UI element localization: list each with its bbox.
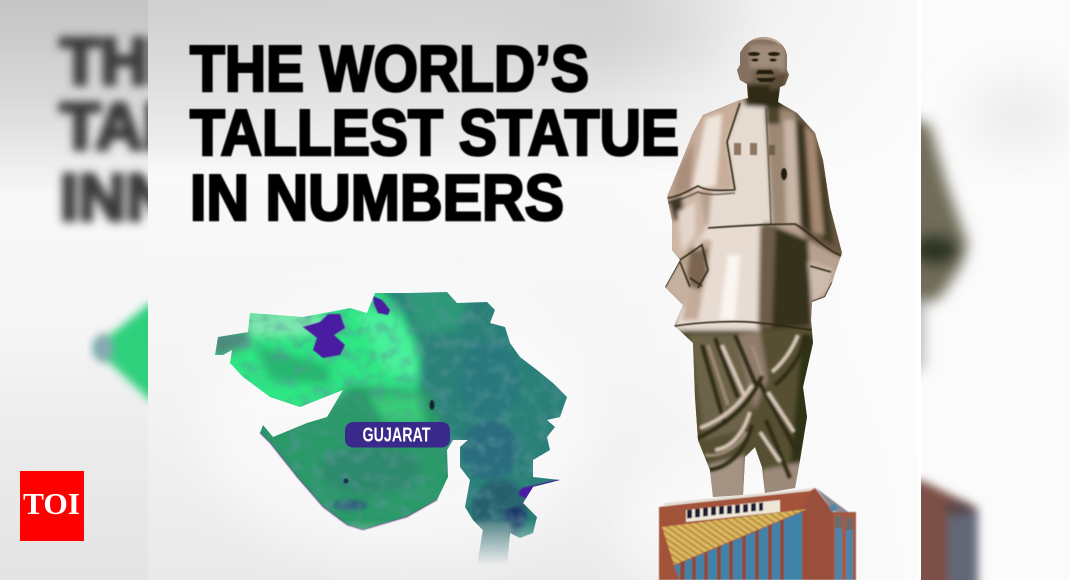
map: texture	[233, 293, 566, 524]
white divider	[917, 0, 921, 580]
logo: TOI	[20, 471, 84, 541]
statue: cloak flap	[671, 102, 738, 196]
title	[190, 32, 679, 234]
building: roof slope	[816, 488, 855, 517]
blurred left backdrop: THE	[60, 24, 192, 98]
map: south tail tone	[475, 520, 513, 555]
statue	[660, 30, 850, 500]
statue: face	[748, 38, 781, 82]
statue: soft shading	[660, 30, 850, 500]
statue: medals	[734, 143, 787, 180]
building: side wall	[802, 488, 833, 580]
map: coast edge	[260, 433, 437, 530]
statue: vest	[708, 103, 772, 230]
map: colour regions	[215, 292, 567, 558]
building: front windows	[674, 512, 802, 580]
label: Gujarat: GUJARAT	[362, 424, 430, 446]
blurred left backdrop: TAL	[60, 89, 183, 163]
statue: dhoti folds	[698, 335, 806, 478]
building: upper window strip	[686, 500, 780, 522]
title: IN NUMBERS	[190, 161, 564, 234]
statue: fold lines	[665, 103, 842, 330]
map: salt marsh	[303, 296, 560, 500]
map: Gujarat	[215, 292, 567, 563]
title: TALLEST STATUE	[190, 96, 679, 169]
statue: lower kurta	[675, 224, 765, 330]
logo: TOI: TOI	[23, 486, 80, 521]
statue: torso base	[660, 95, 850, 330]
statue: drape	[778, 102, 842, 259]
statue: dhoti base	[678, 323, 813, 492]
blurred left backdrop	[0, 0, 148, 580]
building: roof edge	[664, 488, 815, 506]
blurred left backdrop: INN	[60, 160, 174, 234]
building	[659, 488, 856, 580]
statue: hands	[686, 248, 708, 290]
building: right windows	[833, 512, 856, 580]
building: yellow panel	[662, 509, 807, 565]
statue: head	[737, 37, 789, 86]
label: Gujarat	[345, 422, 450, 448]
title: THE WORLD’S	[190, 32, 589, 105]
blurred right backdrop	[921, 113, 984, 580]
center panel background	[148, 0, 748, 580]
statue: sleeve	[668, 192, 706, 260]
building: brick facade	[659, 488, 817, 580]
